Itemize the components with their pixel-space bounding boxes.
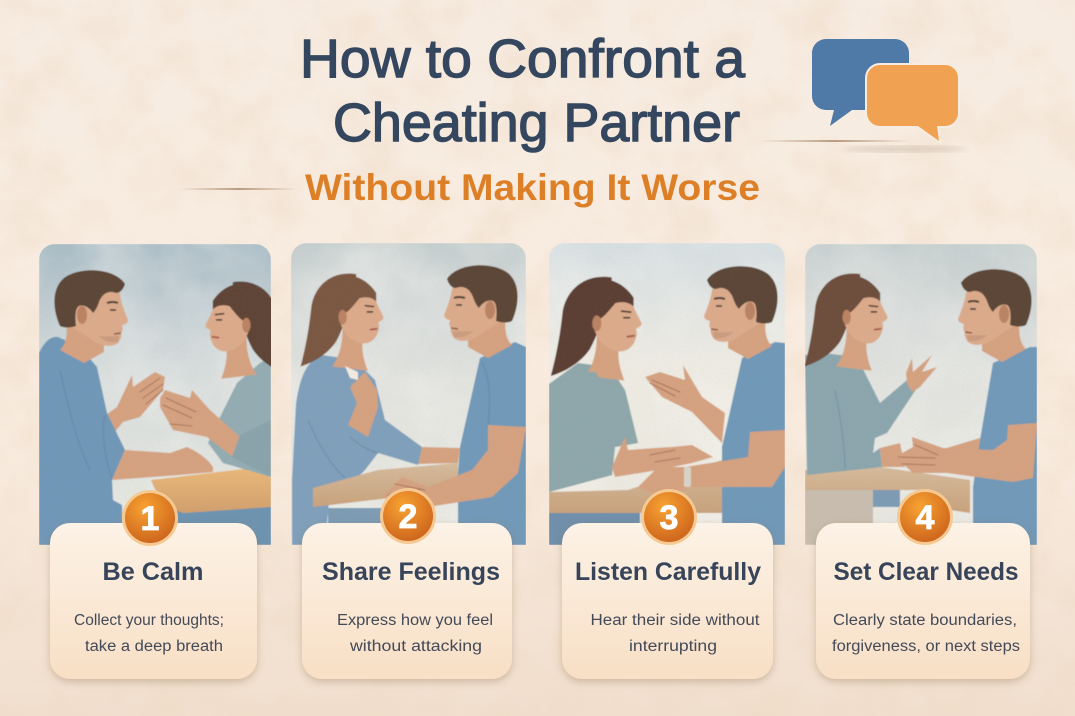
title: [300, 29, 746, 153]
woman: [160, 281, 271, 478]
card: step 4: [816, 489, 1030, 679]
man: [39, 270, 213, 545]
lower surfaces: [805, 490, 873, 545]
description: forgiveness, or next steps: [832, 638, 1020, 655]
card: step 2: [302, 488, 512, 679]
table: [549, 460, 722, 513]
badge 2: [380, 488, 436, 544]
table: [805, 467, 970, 513]
man: [895, 269, 1037, 545]
woman: [549, 277, 713, 492]
description: Express how you feel: [337, 612, 493, 629]
panel: step 3 illustration: [549, 243, 785, 545]
description: take a deep breath: [85, 638, 223, 655]
heading: Share Feelings: Share Feelings: [322, 558, 500, 586]
panel: step 1 illustration: [39, 244, 288, 545]
card: step 1: [50, 490, 257, 679]
description: [832, 612, 1020, 655]
badge 4: [897, 489, 953, 545]
icon: speech bubbles: [812, 39, 967, 152]
description: [74, 612, 224, 655]
table: [151, 467, 271, 513]
subtitle: Without Making It Worse: [305, 167, 760, 208]
man: [382, 265, 526, 545]
badge 1: [122, 490, 178, 546]
title: How to Confront a: [300, 29, 746, 89]
description: [590, 612, 760, 655]
badge 4: 4: [916, 499, 935, 537]
woman: [292, 273, 460, 545]
description: without attacking: [349, 638, 482, 655]
badge 2: 2: [399, 498, 417, 536]
panel: step 2 illustration: [291, 243, 526, 545]
badge 3: [641, 489, 697, 545]
heading: Set Clear Needs: Set Clear Needs: [834, 558, 1018, 586]
description: Clearly state boundaries,: [833, 612, 1017, 629]
badge 3: 3: [660, 499, 678, 537]
decorative line right: [760, 140, 910, 142]
man: [638, 266, 785, 545]
heading: Listen Carefully: Listen Carefully: [575, 558, 761, 586]
heading: Be Calm: Be Calm: [102, 558, 204, 586]
panel: step 4 illustration: [805, 244, 1037, 545]
table: [313, 463, 458, 507]
decorative line left: [180, 188, 298, 190]
card: step 3: [562, 489, 773, 679]
description: interrupting: [629, 638, 717, 655]
woman: [805, 273, 937, 475]
description: Collect your thoughts;: [74, 612, 224, 629]
description: Hear their side without: [590, 612, 760, 629]
title: Cheating Partner: [333, 93, 740, 153]
badge 1: 1: [141, 500, 159, 538]
description: [337, 612, 493, 655]
